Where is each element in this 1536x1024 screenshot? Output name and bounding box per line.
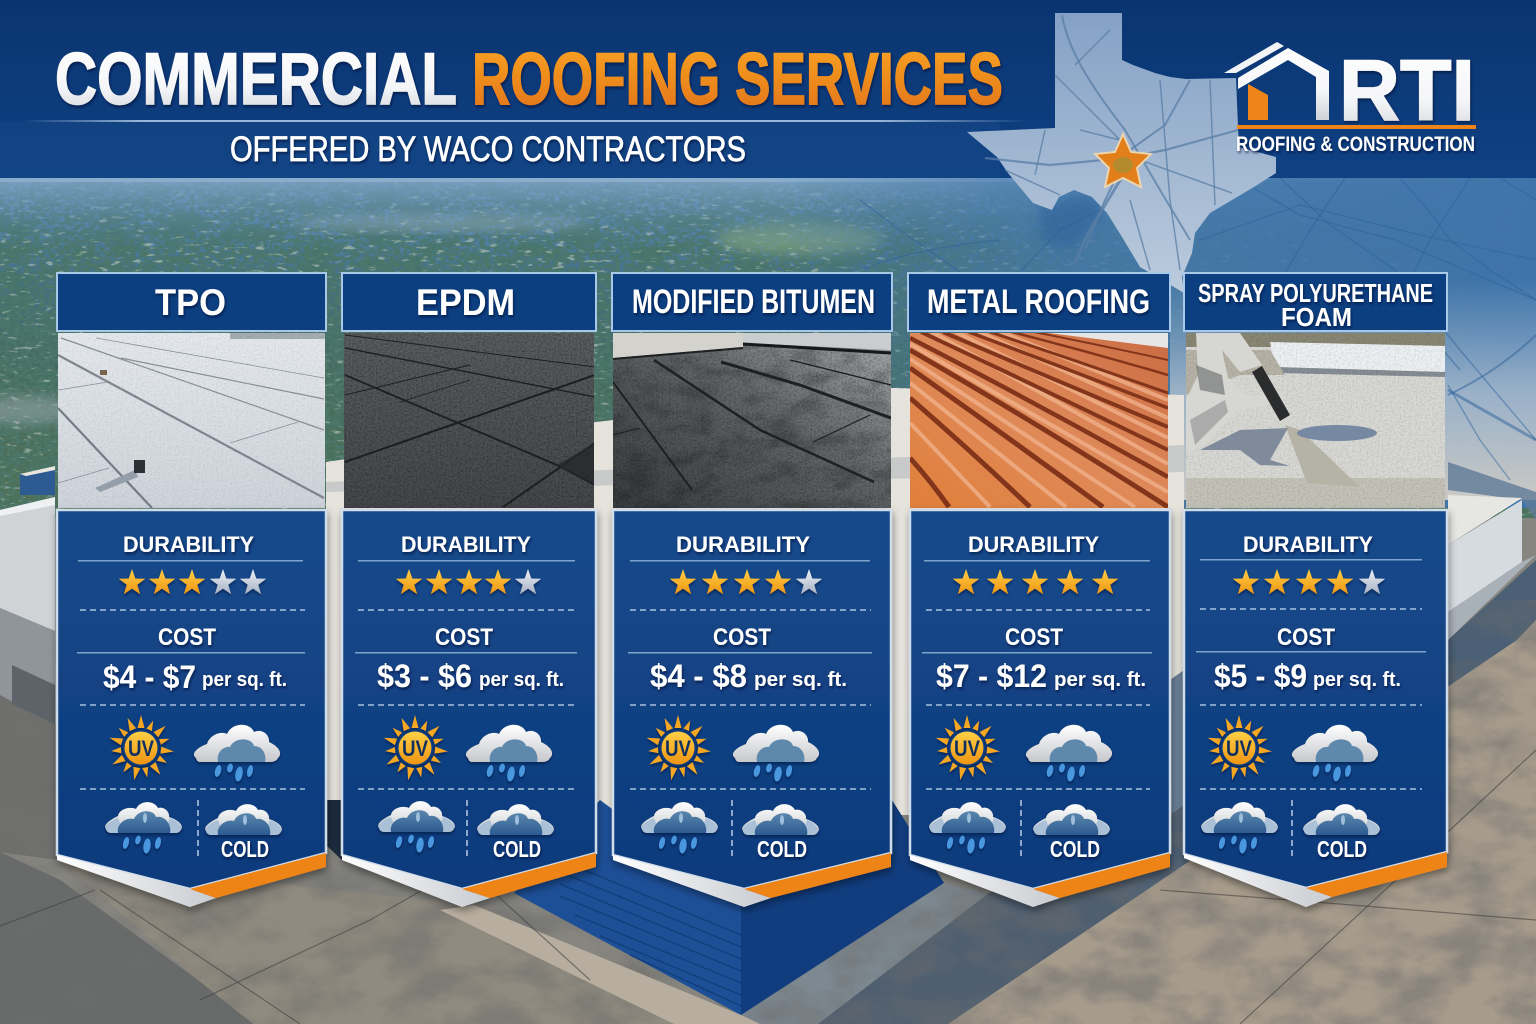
subtitle: OFFERED BY WACO CONTRACTORS <box>230 130 746 169</box>
Metal Roofing cost: $7 - $12 <box>936 658 1047 694</box>
logo: RTI Roofing & Construction: ROOFING & CONSTRUCTION <box>1236 133 1475 156</box>
logo: RTI Roofing & Construction: RTI <box>1339 43 1475 139</box>
Modified Bitumen card body <box>613 510 891 907</box>
Modified Bitumen header <box>612 273 892 331</box>
TPO weather icons <box>80 715 305 862</box>
EPDM header <box>342 273 596 331</box>
EPDM weather icons <box>358 715 578 862</box>
TPO card body <box>57 510 326 907</box>
TPO roof photo <box>56 331 328 510</box>
Spray Polyurethane Foam header <box>1184 273 1447 332</box>
Spray Polyurethane Foam photo <box>1184 331 1447 510</box>
EPDM roof photo <box>342 331 596 510</box>
Modified Bitumen header: MODIFIED BITUMEN <box>632 283 875 321</box>
background: roof structure behind cards <box>0 388 1536 815</box>
Texas map with road lines <box>967 13 1276 293</box>
Spray Polyurethane Foam weather icons: COLD <box>1317 836 1367 862</box>
Metal Roofing card body <box>910 510 1170 907</box>
title: ROOFING SERVICES <box>472 39 1003 120</box>
Modified Bitumen durability rating: DURABILITY <box>676 532 810 557</box>
Metal Roofing weather icons <box>926 715 1150 862</box>
Metal Roofing weather icons: UV <box>954 736 980 761</box>
EPDM cost: COST <box>435 624 493 651</box>
Spray Polyurethane Foam cost: COST <box>1277 624 1335 651</box>
EPDM weather icons: COLD <box>493 836 541 862</box>
Spray Polyurethane Foam durability rating: DURABILITY <box>1243 532 1373 557</box>
Modified Bitumen weather icons: UV <box>665 736 691 761</box>
Metal Roofing header <box>908 273 1170 331</box>
TPO cost <box>77 624 305 705</box>
EPDM durability rating <box>358 532 575 610</box>
Modified Bitumen cost: $4 - $8 <box>650 658 747 694</box>
background: map overlay on the right <box>780 178 1536 508</box>
Modified Bitumen durability rating <box>630 532 871 610</box>
Spray Polyurethane Foam weather icons <box>1200 715 1422 862</box>
Metal Roofing weather icons: COLD <box>1050 836 1100 862</box>
Spray Polyurethane Foam header: SPRAY POLYURETHANE <box>1198 278 1433 308</box>
EPDM cost: $3 - $6 <box>377 658 472 694</box>
Metal Roofing durability rating: DURABILITY <box>968 532 1099 557</box>
Spray Polyurethane Foam weather icons: UV <box>1226 736 1252 761</box>
Metal Roofing cost: COST <box>1005 624 1063 651</box>
TPO cost: COST <box>158 624 216 651</box>
EPDM weather icons: UV <box>402 736 428 761</box>
icon: Waco star marker <box>1095 134 1151 187</box>
TPO durability rating: DURABILITY <box>123 532 254 557</box>
Metal Roofing cost <box>922 624 1152 705</box>
Spray Polyurethane Foam card body <box>1184 510 1447 907</box>
EPDM cost: per sq. ft. <box>479 669 564 691</box>
Spray Polyurethane Foam durability rating <box>1200 532 1422 609</box>
panel: Metal Roofing card <box>908 273 1170 907</box>
background: concrete ground <box>0 540 1536 1024</box>
Metal Roofing photo <box>908 331 1170 510</box>
Spray Polyurethane Foam cost: per sq. ft. <box>1313 669 1401 691</box>
TPO weather icons: UV <box>128 736 154 761</box>
TPO durability rating <box>78 532 305 610</box>
TPO cost: per sq. ft. <box>202 669 287 691</box>
EPDM card body <box>342 510 596 907</box>
title: COMMERCIAL <box>55 39 457 120</box>
header banner <box>0 0 1536 178</box>
Metal Roofing header: METAL ROOFING <box>927 283 1150 321</box>
panel: TPO card <box>56 273 328 907</box>
panel: Modified Bitumen card <box>612 273 892 907</box>
Metal Roofing durability rating <box>924 532 1150 610</box>
TPO weather icons: COLD <box>221 836 269 862</box>
EPDM durability rating: DURABILITY <box>401 532 531 557</box>
TPO cost: $4 - $7 <box>103 659 196 695</box>
EPDM cost <box>355 624 577 705</box>
panel: EPDM card <box>342 273 596 907</box>
EPDM header: EPDM <box>416 282 515 323</box>
Modified Bitumen cost: COST <box>713 624 771 651</box>
Modified Bitumen roof photo <box>612 331 892 510</box>
title <box>55 39 1003 120</box>
Modified Bitumen cost <box>628 624 872 705</box>
Metal Roofing cost: per sq. ft. <box>1054 669 1146 691</box>
TPO header: TPO <box>155 282 226 323</box>
logo: RTI Roofing & Construction <box>1224 42 1476 156</box>
background: blue building corner <box>326 670 1184 1015</box>
Modified Bitumen cost: per sq. ft. <box>754 669 847 691</box>
TPO header <box>57 273 326 331</box>
panel: Spray Polyurethane Foam card <box>1184 273 1447 907</box>
background: city skyline photo <box>0 178 1536 518</box>
Spray Polyurethane Foam cost <box>1196 624 1426 705</box>
Modified Bitumen weather icons <box>630 715 871 862</box>
Spray Polyurethane Foam cost: $5 - $9 <box>1214 658 1307 694</box>
Spray Polyurethane Foam header: FOAM <box>1281 302 1352 332</box>
Modified Bitumen weather icons: COLD <box>757 836 807 862</box>
